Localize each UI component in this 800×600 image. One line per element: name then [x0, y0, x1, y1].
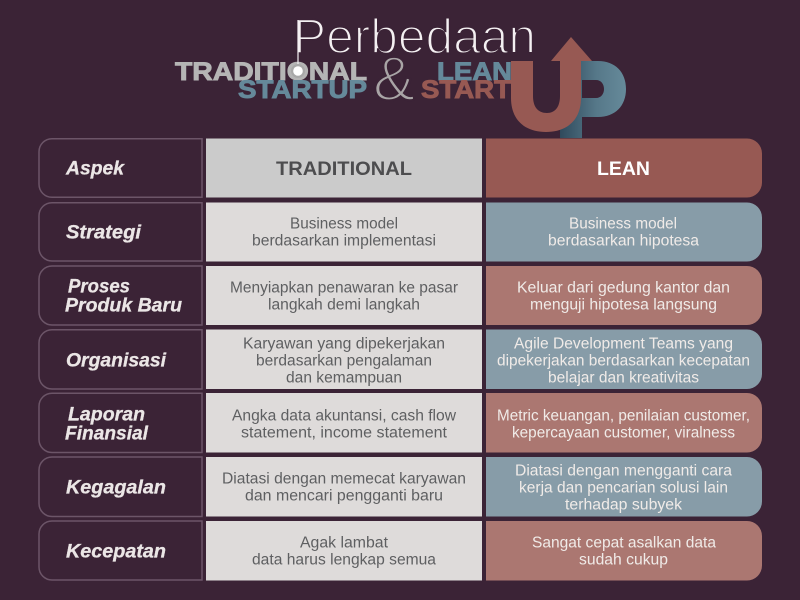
- traditional cell: Karyawan yang dipekerjakan: [243, 336, 445, 353]
- traditional cell: [206, 521, 482, 580]
- heading: Lean Start: [421, 58, 512, 104]
- title graphic: [175, 10, 626, 138]
- lean cell: Diatasi dengan mengganti cara: [515, 463, 732, 480]
- traditional cell: [206, 202, 482, 262]
- traditional cell: dan mencari pengganti baru: [245, 488, 443, 505]
- heading: Lean Start: LEAN: [437, 58, 512, 86]
- lean cell: kepercayaan customer, viralness: [512, 425, 735, 442]
- lean cell: belajar dan kreativitas: [548, 370, 699, 387]
- lean cell: terhadap subyek: [565, 497, 682, 514]
- heading: Traditional Startup: STARTUP: [238, 76, 367, 104]
- label: Kegagalan: [39, 457, 202, 516]
- label: Proses Produk Baru: [39, 266, 202, 325]
- traditional cell: data harus lengkap semua: [252, 552, 436, 569]
- traditional cell: statement, income statement: [241, 425, 448, 442]
- label: Laporan Finansial: [39, 393, 202, 452]
- lean cell: berdasarkan hipotesa: [548, 233, 699, 250]
- column heading: Traditional: [206, 138, 482, 198]
- row: Strategi: [39, 202, 762, 262]
- heading: Lean Start: START: [421, 76, 511, 104]
- row: Kegagalan: [39, 457, 762, 516]
- ampersand: &: [373, 45, 415, 114]
- label: Laporan Finansial: Laporan: [68, 405, 145, 426]
- traditional cell: Agak lambat: [300, 535, 389, 552]
- lean cell: [486, 393, 762, 452]
- title: Perbedaan: Perbedaan: [293, 10, 536, 64]
- lean cell: [486, 457, 762, 516]
- row: Organisasi: [39, 330, 762, 389]
- lean cell: [486, 202, 762, 262]
- label: Proses Produk Baru: Produk Baru: [65, 296, 182, 317]
- row: Proses Produk Baru: [39, 266, 762, 325]
- traditional cell: langkah demi langkah: [268, 297, 420, 314]
- column heading: Lean: [486, 138, 762, 198]
- label: Kegagalan: Kegagalan: [66, 478, 166, 499]
- label: Aspek: Aspek: [65, 159, 125, 180]
- label: Proses Produk Baru: Proses: [68, 277, 130, 298]
- lean cell: [486, 266, 762, 325]
- traditional cell: [206, 266, 482, 325]
- big letter U with arrow: [511, 37, 592, 132]
- traditional cell: Diatasi dengan memecat karyawan: [222, 471, 466, 488]
- label: Aspek: [39, 139, 202, 197]
- row: Laporan Finansial: [39, 393, 762, 452]
- traditional cell: Business model: [290, 216, 398, 233]
- label: Laporan Finansial: Finansial: [65, 424, 149, 445]
- lean cell: Business model: [569, 216, 677, 233]
- lean cell: dipekerjakan berdasarkan kecepatan: [497, 353, 750, 370]
- column heading: Lean: LEAN: [597, 159, 650, 180]
- column heading: Traditional: TRADITIONAL: [276, 159, 412, 180]
- icon: pointer line and dot: [291, 20, 305, 78]
- traditional cell: Menyiapkan penawaran ke pasar: [230, 280, 458, 297]
- traditional cell: berdasarkan pengalaman: [256, 353, 432, 370]
- label: Organisasi: [39, 330, 202, 389]
- label: Kecepatan: [39, 521, 202, 580]
- traditional cell: [206, 330, 482, 389]
- traditional cell: [206, 393, 482, 452]
- lean cell: Agile Development Teams yang: [514, 336, 733, 353]
- label: Organisasi: Organisasi: [66, 351, 167, 372]
- traditional cell: [206, 457, 482, 516]
- table header row: [39, 138, 762, 198]
- lean cell: sudah cukup: [579, 552, 668, 569]
- lean cell: kerja dan pencarian solusi lain: [519, 480, 728, 497]
- heading: Traditional Startup: [175, 58, 367, 104]
- traditional cell: dan kemampuan: [286, 370, 402, 387]
- big letter P: [560, 61, 626, 138]
- label: Strategi: Strategi: [66, 223, 142, 244]
- lean cell: [486, 330, 762, 389]
- lean cell: Metric keuangan, penilaian customer,: [497, 408, 750, 425]
- traditional cell: Angka data akuntansi, cash flow: [232, 408, 457, 425]
- label: Kecepatan: Kecepatan: [66, 542, 166, 563]
- lean cell: [486, 521, 762, 580]
- lean cell: Keluar dari gedung kantor dan: [517, 280, 730, 297]
- lean cell: menguji hipotesa langsung: [530, 297, 717, 314]
- row: Kecepatan: [39, 521, 762, 580]
- label: Strategi: [39, 203, 202, 261]
- traditional cell: berdasarkan implementasi: [252, 233, 436, 250]
- lean cell: Sangat cepat asalkan data: [532, 535, 716, 552]
- heading: Traditional Startup: TRADITIONAL: [175, 58, 367, 86]
